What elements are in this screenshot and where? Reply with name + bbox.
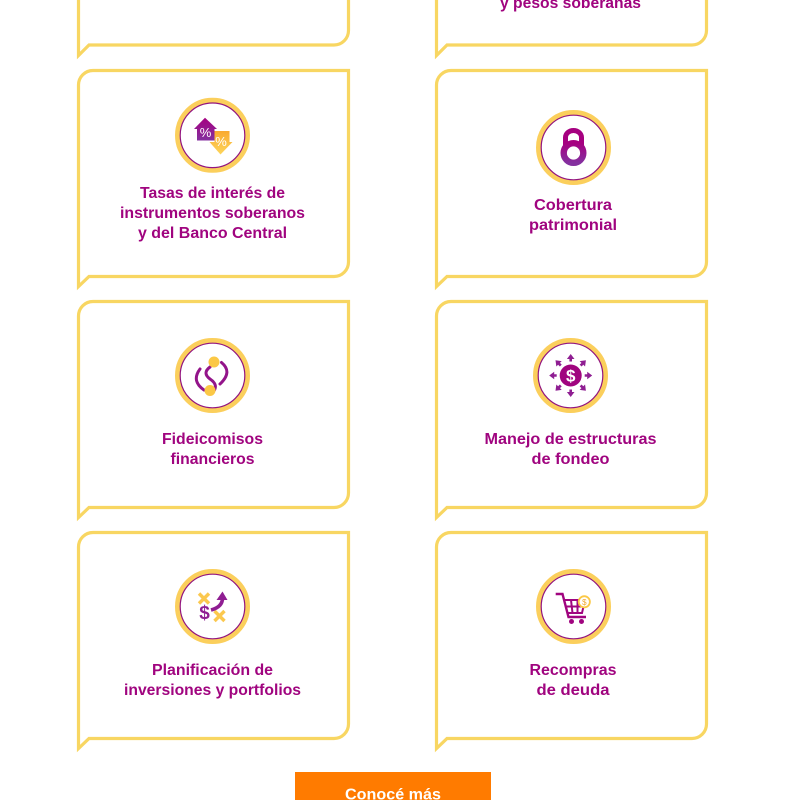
panel: fideicomisos financieros	[78, 302, 348, 518]
card label: financieros	[170, 451, 255, 468]
panel: top right card (cropped)	[436, 0, 706, 56]
icon: padlock	[538, 112, 608, 182]
icon: percent arrows	[178, 100, 248, 170]
panel: recompras de deuda	[436, 532, 706, 748]
panel: tasas de interés	[78, 70, 348, 286]
panel: cobertura patrimonial	[436, 70, 706, 286]
bubble outline	[436, 0, 706, 56]
card label	[484, 431, 657, 468]
icon: percent arrows: %	[200, 125, 212, 140]
icon: dollar with radiating arrows	[536, 340, 606, 410]
card label	[120, 185, 305, 242]
card label: de deuda	[536, 682, 610, 699]
icon: strategy plan: $	[199, 603, 210, 624]
icon: percent arrows: %	[215, 134, 227, 149]
panel: planificación de inversiones	[78, 532, 348, 748]
card label	[162, 431, 263, 468]
icon: exchange circles	[178, 340, 248, 410]
bubble outline	[78, 532, 348, 748]
panel: top left card (cropped)	[78, 0, 348, 56]
card label: Planificación de	[152, 662, 273, 679]
card label: inversiones y portfolios	[124, 682, 301, 699]
bubble outline	[78, 302, 348, 518]
card label: Fideicomisos	[162, 431, 263, 448]
bubble outline	[436, 532, 706, 748]
card label: y del Banco Central	[138, 225, 287, 242]
card label: Manejo de estructuras	[484, 431, 657, 448]
card label	[530, 662, 617, 699]
card label: Tasas de interés de	[140, 185, 285, 202]
card label	[124, 662, 301, 699]
card label: de fondeo	[532, 451, 610, 468]
card label	[529, 197, 617, 234]
button: conocé más	[295, 772, 491, 800]
icon: dollar with radiating arrows: $	[566, 366, 576, 386]
bubble outline	[436, 302, 706, 518]
bubble outline	[78, 70, 348, 286]
card label: instrumentos soberanos	[120, 205, 305, 222]
icon: strategy plan	[178, 572, 248, 642]
icon: shopping cart with coin	[538, 572, 608, 642]
card label: patrimonial	[529, 217, 617, 234]
icon: shopping cart with coin: $	[582, 598, 587, 607]
card label: Cobertura	[534, 197, 612, 214]
panel: manejo de estructuras de fondeo	[436, 302, 706, 518]
bubble outline	[436, 70, 706, 286]
card label: Recompras	[530, 662, 617, 679]
